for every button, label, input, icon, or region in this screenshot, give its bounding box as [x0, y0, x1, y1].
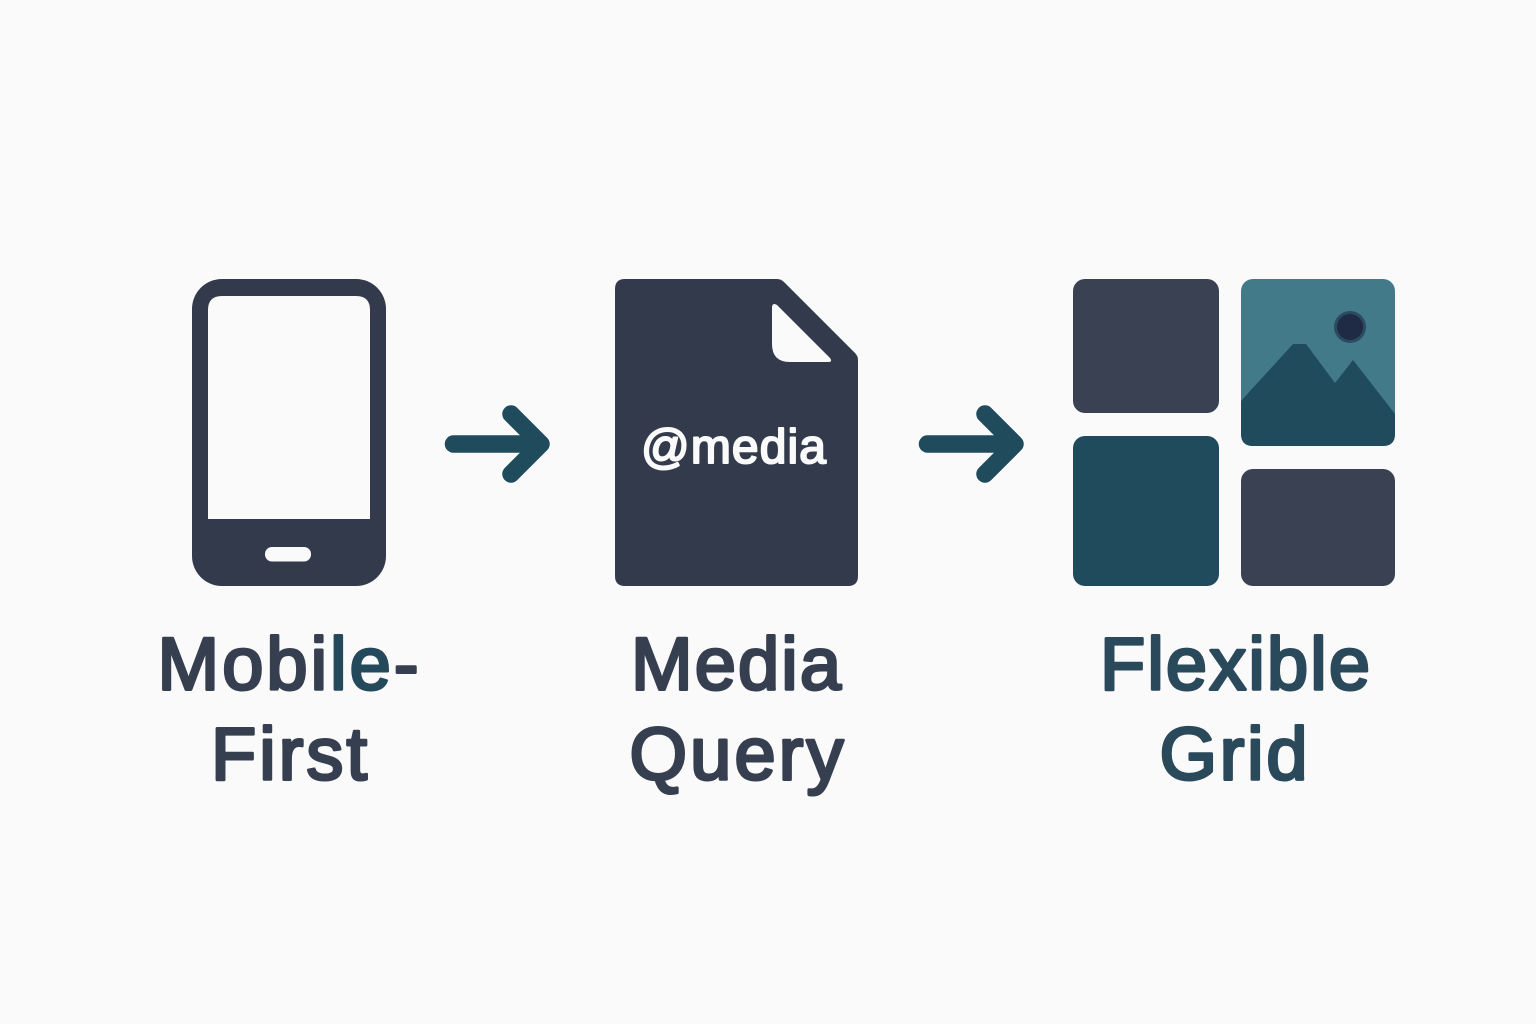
label: Mobile-First: [158, 622, 418, 796]
icon: smartphone: [192, 279, 386, 586]
arrow: media query to grid: [928, 414, 1015, 474]
label: Mobile-First: First: [211, 712, 367, 796]
label: Media Query: Query: [630, 712, 844, 796]
label: Flexible Grid: [1100, 622, 1370, 796]
icon: flexible grid: [1073, 279, 1395, 586]
media label: @media: [641, 421, 826, 474]
label: Flexible Grid: Flexible: [1100, 622, 1370, 706]
label: Flexible Grid: Grid: [1160, 712, 1308, 796]
arrow: mobile to media query: [454, 414, 541, 474]
icon: media query document: [615, 279, 858, 586]
label: Media Query: Media: [631, 622, 842, 706]
label: Media Query: [630, 622, 844, 796]
label: Mobile-First: Mobile-: [158, 622, 418, 706]
grid image tile: [1241, 279, 1395, 446]
